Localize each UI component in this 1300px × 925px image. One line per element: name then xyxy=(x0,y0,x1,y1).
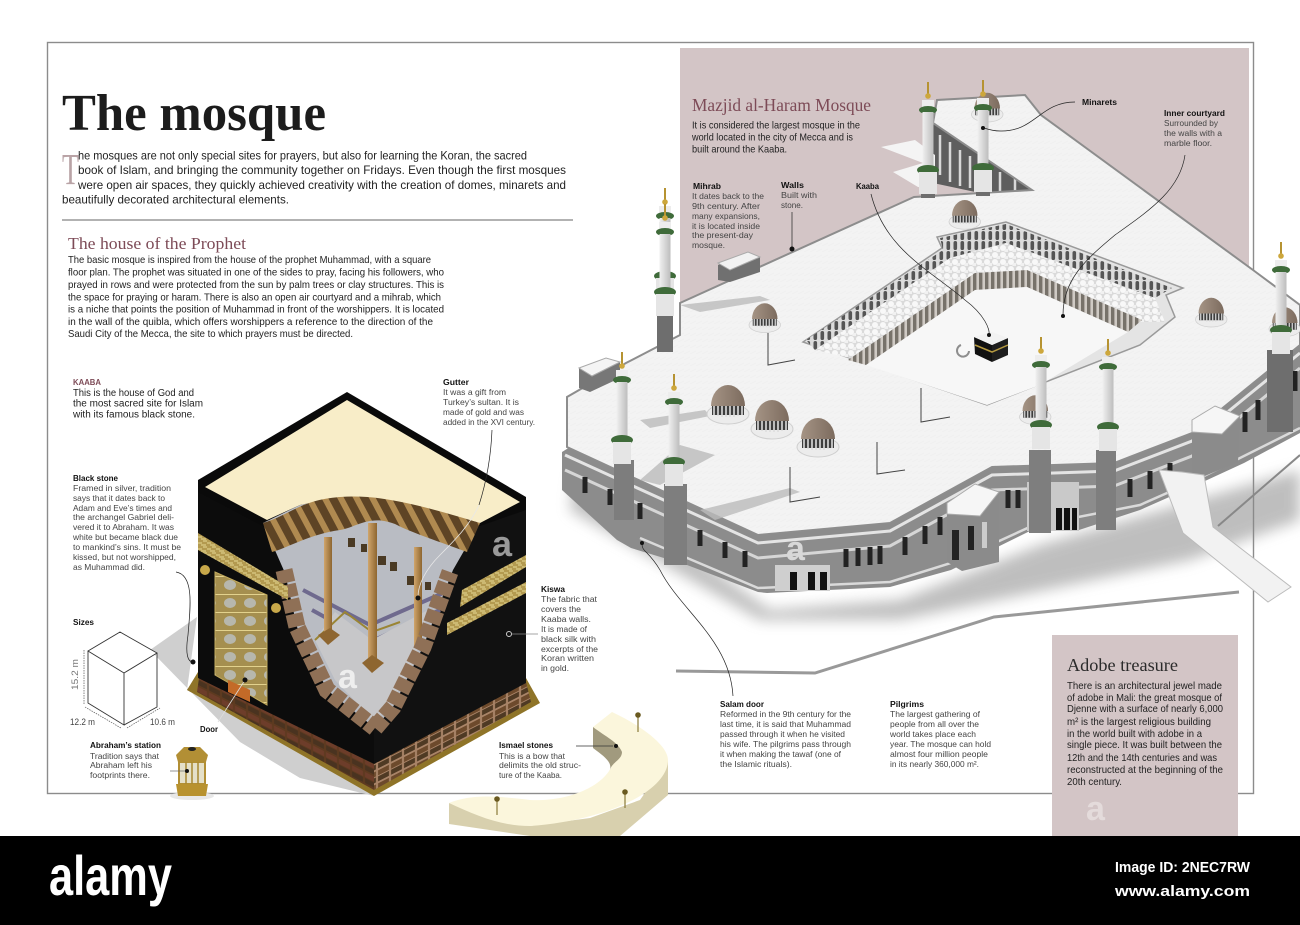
sizes diagram: 12.2 m xyxy=(70,717,95,727)
small Kaaba xyxy=(957,332,1008,362)
text block: house of the Prophet: The basic mosque is inspired from the house of the prophet Muhammad, with a square xyxy=(68,255,431,266)
callout: Salam door: Reformed in the 9th century for the xyxy=(720,709,851,719)
callout: Walls: Walls xyxy=(781,180,804,190)
inner courtyard floor xyxy=(866,287,1128,405)
callout: Kiswa: It is made of xyxy=(541,624,588,634)
panel: Adobe treasure: single piece. It was built between the xyxy=(1067,740,1222,751)
text block: house of the Prophet: the space for praying or haram. There is also an open air courtyard and a mihrab, which xyxy=(68,292,441,304)
callout: Inner courtyard xyxy=(1061,108,1225,318)
callout: Ismael stones: Ismael stones xyxy=(499,740,553,750)
central gates xyxy=(614,176,1293,591)
kiswa belts right xyxy=(460,555,526,607)
mosque illustration xyxy=(562,80,1300,673)
callout: Mihrab: many expansions, xyxy=(692,211,760,221)
callout: Black stone: the archangel Gabriel deli- xyxy=(73,512,174,522)
callout: Kiswa: black silk with xyxy=(541,634,596,644)
kiswa belt left xyxy=(198,533,288,600)
footer bar: Image ID: 2NEC7RW xyxy=(1115,860,1250,876)
callout: Salam door: the Islamic rituals). xyxy=(720,759,792,769)
heading: Mazjid al-Haram Mosque: Mazjid al-Haram Mosque xyxy=(692,95,871,115)
callout: Abraham's station xyxy=(90,740,161,780)
callout: Mihrab: it is located inside xyxy=(692,221,760,231)
minarets xyxy=(917,82,939,194)
intro text block xyxy=(62,145,566,206)
cast shadow xyxy=(150,617,374,796)
callout: Pilgrims: people from all over the xyxy=(890,719,979,729)
facade xyxy=(562,340,1300,593)
text block: KAABA: the most sacred site for Islam xyxy=(73,398,203,410)
callout: Ismael stones xyxy=(499,740,581,780)
callout: Black stone: Black stone xyxy=(73,473,118,483)
callout: Black stone: says that it dates back to xyxy=(73,493,165,503)
callout: Pilgrims: The largest gathering of xyxy=(890,709,981,719)
callout: Black stone: Adam and Eve’s times and xyxy=(73,503,172,513)
panel: Adobe treasure: a xyxy=(1086,790,1106,828)
callout: Abraham's station: Abraham’s station xyxy=(90,740,161,750)
columns xyxy=(318,523,422,673)
panel: Adobe treasure: reconstructed at the beginning of the xyxy=(1067,765,1223,776)
callout: Walls: stone. xyxy=(781,200,803,210)
panel: Mazjid al-Haram background xyxy=(680,48,1249,348)
callout: Kaaba xyxy=(856,181,991,337)
panel: Adobe treasure: 20th century. xyxy=(1067,777,1122,788)
callout: Gutter: Turkey’s sultan. It is xyxy=(443,397,519,407)
callout: Walls: Built with xyxy=(781,190,817,200)
callout: Mihrab: Mihrab xyxy=(693,181,721,191)
callout: Salam door: Salam door xyxy=(720,699,765,709)
panel: Adobe treasure: m² is the largest religious building xyxy=(1067,717,1211,728)
intro text block: book of Islam, and bringing the community together on Fridays. Even though the first mosques xyxy=(78,163,566,177)
callout: Minarets: Minarets xyxy=(1082,97,1117,107)
callout: Minarets xyxy=(981,97,1117,131)
callout: Pilgrims: in its nearly 360,000 m². xyxy=(890,759,979,769)
callout: Black stone: kissed, but not worshipped, xyxy=(73,552,176,562)
top rim xyxy=(198,392,526,526)
callout: Gutter: added in the XVI century. xyxy=(443,417,535,427)
callout: Black stone: Framed in silver, tradition xyxy=(73,483,171,493)
footer bar xyxy=(0,836,1300,925)
sizes diagram: 10.6 m xyxy=(150,717,175,727)
callout: Ismael stones: delimits the old struc- xyxy=(499,760,581,770)
callout: Mihrab: It dates back to the xyxy=(692,191,764,201)
text block: Mazjid description: world located in the city of Mecca and is xyxy=(691,132,853,144)
callout: Mihrab: the present-day xyxy=(692,230,754,240)
roof xyxy=(567,95,1300,535)
sizes diagram: 15.2 m xyxy=(70,659,80,690)
right wall xyxy=(374,497,526,764)
roof shadows xyxy=(640,296,800,520)
callout: Mihrab: mosque. xyxy=(692,240,725,250)
text block: house of the Prophet: Saudi City of the Mecca, the site to which prayers must be directed. xyxy=(68,329,353,340)
callout: Pilgrims: year. The mosque can hold xyxy=(890,739,991,749)
Ismael stones illustration xyxy=(449,712,668,836)
callout: Inner courtyard: Surrounded by xyxy=(1164,118,1219,128)
intro text block: he mosques are not only special sites for prayers, but also for learning the Koran, the sacred xyxy=(78,148,527,162)
callout: Inner courtyard: the walls with a xyxy=(1164,128,1222,138)
callout: Gutter: It was a gift from xyxy=(443,387,506,397)
callout: Kiswa: in gold. xyxy=(541,663,569,673)
callout: Ismael stones: ture of the Kaaba. xyxy=(499,770,562,780)
text block: house of the Prophet xyxy=(68,255,444,340)
text block: Mazjid description: It is considered the largest mosque in the xyxy=(692,120,860,132)
panel: Adobe treasure: Djenne with a surface of nearly 6,000 xyxy=(1067,704,1223,715)
intro text block: beautifully decorated architectural elements. xyxy=(62,192,289,206)
callout: Kiswa: Kiswa xyxy=(541,584,565,594)
callout: Abraham's station: Tradition says that xyxy=(90,751,160,761)
callout: Salam door: last time, it is said that Muhammad xyxy=(720,719,851,729)
callout: Pilgrims: world takes place each xyxy=(889,729,976,739)
roof poles xyxy=(768,333,950,502)
hanging lamps xyxy=(348,538,431,590)
text block: KAABA xyxy=(72,377,203,420)
callout: Salam door xyxy=(640,541,851,769)
ceiling beams xyxy=(263,497,480,552)
top cream ceiling xyxy=(205,400,520,523)
gold medallions xyxy=(200,565,210,575)
ground shadow xyxy=(570,470,1300,620)
callout: Kiswa: Koran written xyxy=(541,653,594,663)
callout: Kiswa: The fabric that xyxy=(541,594,598,604)
callout: Door: Door xyxy=(200,724,219,734)
heading: The house of the Prophet: The house of the Prophet xyxy=(68,234,246,253)
footer bar: www.alamy.com xyxy=(1114,884,1250,900)
callout: Kiswa: excerpts of the xyxy=(541,644,598,654)
callout: Salam door: passed through it when he visited xyxy=(720,729,845,739)
icon: Abraham's station lantern xyxy=(170,747,214,800)
courtyard arcades xyxy=(803,222,1183,405)
callout: Door xyxy=(200,678,248,734)
callout: Pilgrims: almost four million people xyxy=(890,749,988,759)
callout: Salam door: it when making the tawaf (one of xyxy=(720,749,842,759)
sizes diagram: Sizes xyxy=(73,617,94,627)
door xyxy=(215,572,267,705)
domes xyxy=(749,303,780,332)
brick band left xyxy=(197,678,374,790)
gold base plinth xyxy=(187,672,540,796)
intro text block: T xyxy=(62,145,79,194)
interior floor xyxy=(315,610,428,722)
callout: Inner courtyard: marble floor. xyxy=(1164,138,1212,148)
callout: Kiswa: covers the xyxy=(541,604,581,614)
panel: Adobe treasure: There is an architectural jewel made xyxy=(1067,681,1222,692)
watermark letters: a xyxy=(492,523,513,564)
callout: Abraham's station: footprints there. xyxy=(90,770,150,780)
callout: Pilgrims xyxy=(889,699,991,769)
ramp xyxy=(1159,470,1291,602)
text block: house of the Prophet: floor plan. The prophet was situated in one of the sides to pray, facing his followers, who xyxy=(68,268,444,278)
interior purple bands xyxy=(303,590,450,642)
panel frame xyxy=(48,42,1254,794)
text block: KAABA: KAABA xyxy=(73,377,101,387)
callout: Gutter xyxy=(416,377,535,600)
callout: Black stone: to mankind’s sins. It must be xyxy=(73,542,181,552)
Kaaba cutaway illustration xyxy=(150,392,540,796)
text block: KAABA: This is the house of God and xyxy=(73,388,194,399)
callout: Black stone xyxy=(72,473,196,664)
callout: Gutter: Gutter xyxy=(443,377,470,387)
panel: Adobe treasure: 12th and the 14th centuries and was xyxy=(1067,753,1217,764)
panel: Adobe treasure: in the world built with adobe in a xyxy=(1067,729,1202,740)
panel: Adobe treasure: of adobe in Mali: the great mosque of xyxy=(1067,693,1222,704)
callout: Inner courtyard: Inner courtyard xyxy=(1164,108,1225,118)
watermark letter on facade: a xyxy=(786,530,806,568)
callout: Kiswa: Kaaba walls. xyxy=(541,614,591,624)
bastions xyxy=(579,252,1240,571)
callout: Black stone: vered it to Abraham. It was xyxy=(73,522,174,532)
callout: Kiswa xyxy=(506,584,598,673)
callout: Mihrab: 9th century. After xyxy=(692,201,760,211)
left wall xyxy=(198,480,374,764)
callout: Walls xyxy=(781,180,817,252)
Kaaba cutaway illustration: a xyxy=(338,658,358,696)
upper annex facade xyxy=(933,123,1032,195)
callout: Gutter: made of gold and was xyxy=(443,407,524,417)
panel: Adobe treasure: Adobe treasure xyxy=(1067,655,1178,675)
brick band right xyxy=(374,682,531,790)
white annex terrace xyxy=(881,140,935,188)
text block: house of the Prophet: is a niche that points the position of Muhammad in front of the worshippers. It is located xyxy=(68,304,444,316)
callout: Ismael stones: This is a bow that xyxy=(499,751,566,761)
intro text block: were open air spaces, they quickly achieved creativity with the creation of domes, minarets and xyxy=(77,178,566,192)
text block: house of the Prophet: prayed in rows and were protected from the sun by palm trees or clay structures. This is xyxy=(68,280,444,291)
cut interior walls xyxy=(263,497,480,728)
callout: Mihrab xyxy=(692,181,764,250)
callout: Salam door: his wife. The pilgrims pass through xyxy=(720,739,851,749)
title: The mosque xyxy=(62,85,326,142)
callout: Kaaba: Kaaba xyxy=(856,181,879,191)
text block: Mazjid description: built around the Kaaba. xyxy=(692,144,787,156)
text block: house of the Prophet: in the wall of the quibla, which offers worshippers a reference to the direction of the xyxy=(68,317,433,328)
stone cut edge xyxy=(284,570,450,728)
white platform line xyxy=(676,592,1239,673)
panel: Adobe treasure xyxy=(1052,635,1238,836)
callout: Black stone: as Muhammad did. xyxy=(73,562,145,572)
footer bar: alamy xyxy=(49,844,172,907)
callout: Black stone: white but became black due xyxy=(72,532,178,542)
text block: KAABA: with its famous black stone. xyxy=(72,410,195,420)
text block: Mazjid description xyxy=(691,120,860,156)
callout: Abraham's station: Abraham left his xyxy=(90,760,152,770)
callout: Pilgrims: Pilgrims xyxy=(890,699,924,709)
sizes diagram xyxy=(70,617,175,728)
